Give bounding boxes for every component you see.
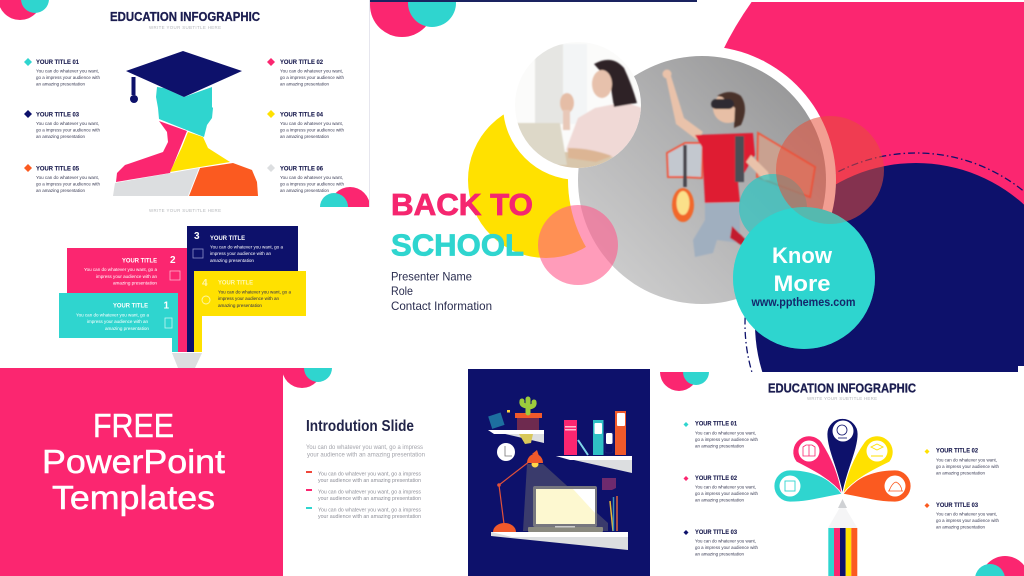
item 01: go a impress your audience with xyxy=(36,75,100,81)
bottom shelf xyxy=(491,532,628,550)
know more call to action xyxy=(751,243,856,309)
item 02: YOUR TITLE 02 xyxy=(280,59,323,66)
item 01 xyxy=(24,58,100,88)
clock xyxy=(497,443,515,461)
know more call to action: Know xyxy=(772,243,833,268)
upper left shelf with plant xyxy=(488,399,544,444)
item 04 xyxy=(267,110,344,140)
left item 03: go a impress your audience with xyxy=(695,545,758,551)
box 3 navy: amazing presentation xyxy=(210,258,254,264)
box 1 teal: impress your audience with an xyxy=(87,319,148,325)
left item 02: an amazing presentation xyxy=(695,498,744,504)
item 03: an amazing presentation xyxy=(36,134,85,140)
item 02: go a impress your audience with xyxy=(280,75,344,81)
item 03: go a impress your audience with xyxy=(36,128,100,134)
right item 02: an amazing presentation xyxy=(936,470,985,476)
box 2 pink: amazing presentation xyxy=(113,280,157,286)
item 06: go a impress your audience with xyxy=(280,182,344,188)
item 05: an amazing presentation xyxy=(36,188,85,194)
box 4 yellow: 4 xyxy=(202,278,208,289)
right item 02: go a impress your audience with xyxy=(936,464,999,470)
box 3 navy: 3 xyxy=(194,231,200,242)
left item 02: YOUR TITLE 02 xyxy=(695,475,737,482)
box 3 navy: You can do whatever you want, go a xyxy=(210,244,283,250)
panel: free powerpoint templates: FREE xyxy=(93,407,174,444)
subtitle: WRITE YOUR SUBTITLE HERE xyxy=(149,208,221,213)
box 2 pink: YOUR TITLE xyxy=(122,258,158,264)
left item 01: YOUR TITLE 01 xyxy=(695,420,737,428)
item 03 xyxy=(24,110,100,140)
item 02 xyxy=(267,58,344,88)
item 06: an amazing presentation xyxy=(280,188,329,194)
heading: EDUCATION INFOGRAPHIC xyxy=(110,10,260,24)
photo: teacher at laptop xyxy=(518,44,641,168)
corner circles xyxy=(283,368,332,388)
item 05: YOUR TITLE 05 xyxy=(36,166,79,172)
teal know more circle xyxy=(733,207,875,349)
back to school title: SCHOOL xyxy=(391,228,524,262)
sticky note xyxy=(602,478,616,490)
pencil tip xyxy=(172,353,202,368)
item 03: YOUR TITLE 03 xyxy=(36,112,79,118)
right item 02: You can do whatever you want, xyxy=(936,458,997,464)
panel: stacked pencil title boxes xyxy=(59,208,306,368)
know more call to action: www.ppthemes.com xyxy=(751,295,856,309)
box 1 teal: You can do whatever you want, go a xyxy=(76,312,149,318)
box 2 pink: impress your audience with an xyxy=(96,274,157,280)
right item 03: go a impress your audience with xyxy=(936,518,999,524)
left item 02: You can do whatever you want, xyxy=(695,484,756,490)
item 01: You can do whatever you want, xyxy=(36,68,99,74)
petal chart xyxy=(774,418,911,502)
box 4 yellow: impress your audience with an xyxy=(218,296,279,302)
bullet list: You can do whatever you want, go a impress xyxy=(318,472,421,478)
item 05 xyxy=(24,164,100,194)
item 04: You can do whatever you want, xyxy=(280,121,343,127)
box 4 yellow: amazing presentation xyxy=(218,303,262,309)
corner circles top left xyxy=(0,0,49,20)
laptop xyxy=(528,486,603,532)
corner circles xyxy=(370,0,456,37)
left item 01: You can do whatever you want, xyxy=(695,430,756,436)
left item 01 xyxy=(684,420,758,450)
item 06 xyxy=(267,164,344,194)
panel: introduction slide xyxy=(283,368,425,519)
bullet list: your audience with an amazing presentation xyxy=(318,496,421,502)
item 01: an amazing presentation xyxy=(36,82,85,88)
corner circles bottom right xyxy=(975,556,1024,576)
presenter details: Role xyxy=(391,284,413,298)
subtitle: WRITE YOUR SUBTITLE HERE xyxy=(807,396,877,401)
presenter details xyxy=(392,272,492,310)
box 1 teal xyxy=(59,293,178,352)
item 04: go a impress your audience with xyxy=(280,128,344,134)
item 01: YOUR TITLE 01 xyxy=(36,59,79,66)
bullet list: your audience with an amazing presentation xyxy=(318,478,421,484)
right item 02 xyxy=(924,448,999,476)
item 03: You can do whatever you want, xyxy=(36,121,99,127)
pencil xyxy=(828,499,857,576)
photo: boy with rocket wings xyxy=(578,56,826,304)
presenter details: Contact Information xyxy=(391,299,492,313)
left item 03: an amazing presentation xyxy=(695,552,744,558)
box 1 teal: 1 xyxy=(164,300,170,312)
item 06: You can do whatever you want, xyxy=(280,175,343,181)
know more call to action: More xyxy=(774,271,830,296)
desk lamp xyxy=(493,450,608,532)
pencils xyxy=(610,496,617,531)
left item 01: go a impress your audience with xyxy=(695,437,758,443)
bullet list xyxy=(306,471,421,520)
translucent pink circle xyxy=(538,205,618,285)
top navy strip xyxy=(370,0,697,2)
corner circles top left xyxy=(660,372,709,391)
panel: free powerpoint templates: Templates xyxy=(52,479,215,516)
large pink shape xyxy=(724,2,1024,205)
item 02: an amazing presentation xyxy=(280,82,329,88)
left item 03: YOUR TITLE 03 xyxy=(695,529,737,536)
solid teal circle base xyxy=(733,207,875,349)
right item 03: YOUR TITLE 03 xyxy=(936,502,978,509)
box 1 teal: amazing presentation xyxy=(105,326,149,332)
graduation cap xyxy=(126,51,242,103)
intro paragraph xyxy=(306,444,426,458)
left item 01: an amazing presentation xyxy=(695,444,744,450)
bullet list: You can do whatever you want, go a impress xyxy=(318,508,421,514)
item 04: an amazing presentation xyxy=(280,134,329,140)
item 04: YOUR TITLE 04 xyxy=(280,112,323,118)
intro paragraph: You can do whatever you want, go a impress xyxy=(306,444,423,451)
box 3 navy: impress your audience with an xyxy=(210,251,271,257)
navy circle xyxy=(755,163,1024,372)
right item 03 xyxy=(924,502,999,530)
graduate silhouette xyxy=(113,87,258,196)
panel: back to school hero xyxy=(370,2,1024,372)
box 4 yellow: YOUR TITLE xyxy=(218,280,254,286)
translucent teal circle xyxy=(739,174,807,232)
panel: free powerpoint templates: PowerPoint xyxy=(42,443,225,480)
item 06: YOUR TITLE 06 xyxy=(280,166,323,172)
heading: EDUCATION INFOGRAPHIC xyxy=(768,382,916,396)
item 05: You can do whatever you want, xyxy=(36,175,99,181)
left item 03: You can do whatever you want, xyxy=(695,538,756,544)
presenter details: Presenter Name xyxy=(391,270,472,284)
box 4 yellow: You can do whatever you want, go a xyxy=(218,290,291,296)
subtitle: WRITE YOUR SUBTITLE HERE xyxy=(149,25,221,30)
panel: desk illustration xyxy=(468,369,650,576)
petal icons xyxy=(780,420,906,496)
slide title: Introdution Slide xyxy=(306,418,414,435)
box 3 navy xyxy=(187,226,298,352)
bullet list: You can do whatever you want, go a impress xyxy=(318,490,421,496)
translucent red circle xyxy=(776,116,884,224)
box 2 pink: You can do whatever you want, go a xyxy=(84,267,157,273)
right shelf with books xyxy=(556,411,632,473)
item 05: go a impress your audience with xyxy=(36,182,100,188)
white ring behind boy xyxy=(568,48,836,247)
box 2 pink xyxy=(67,248,187,352)
box 2 pink: 2 xyxy=(170,255,176,266)
box 3 navy: YOUR TITLE xyxy=(210,235,246,242)
yellow crescent xyxy=(468,114,586,258)
back to school title xyxy=(391,193,532,256)
dashed arc xyxy=(744,152,1023,372)
left item 02 xyxy=(684,475,758,504)
right item 03: You can do whatever you want, xyxy=(936,512,997,518)
box 1 teal: YOUR TITLE xyxy=(113,302,149,310)
panel: education infographic with graduate xyxy=(0,0,370,227)
item 02: You can do whatever you want, xyxy=(280,68,343,74)
right item 03: an amazing presentation xyxy=(936,524,985,530)
panel: free powerpoint templates xyxy=(0,368,283,576)
left item 03 xyxy=(684,529,758,558)
intro paragraph: your audience with an amazing presentation xyxy=(307,452,426,458)
bullet list: your audience with an amazing presentation xyxy=(318,514,421,520)
corner circles bottom right xyxy=(320,187,369,207)
panel: education infographic with pencil xyxy=(660,353,1024,576)
left item 02: go a impress your audience with xyxy=(695,491,758,497)
right item 02: YOUR TITLE 02 xyxy=(936,448,978,454)
box 4 yellow xyxy=(194,271,306,352)
white ring behind woman xyxy=(504,108,569,180)
back to school title: BACK TO xyxy=(391,187,533,222)
